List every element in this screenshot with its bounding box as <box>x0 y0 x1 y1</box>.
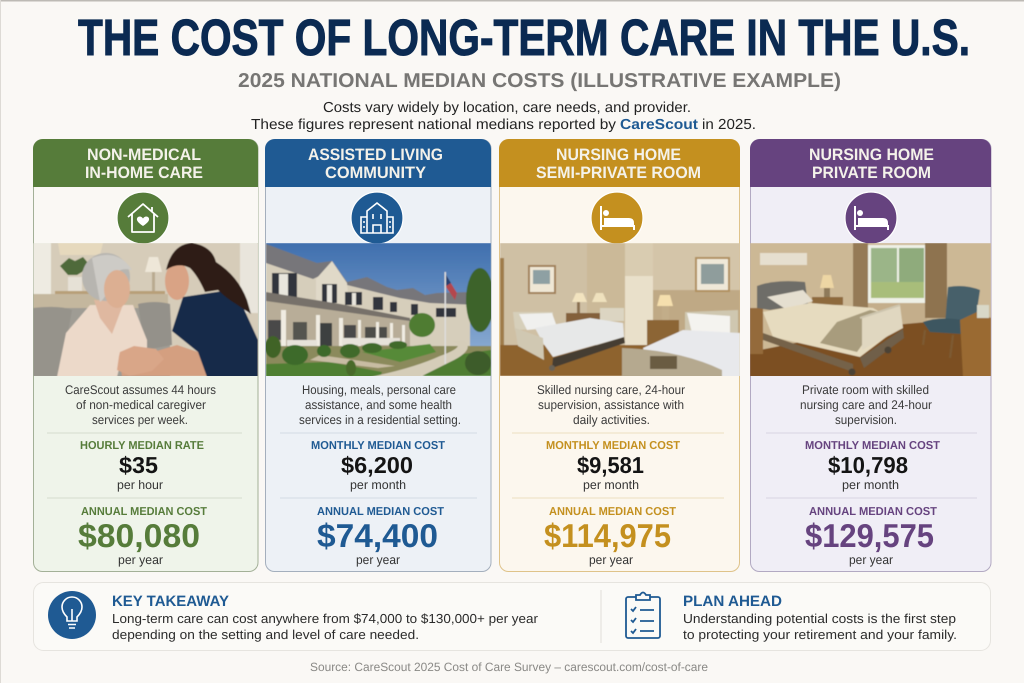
panel: assisted living community <box>265 139 494 572</box>
subtitle: 2025 NATIONAL MEDIAN COSTS (ILLUSTRATIVE EXAMPLE) <box>238 70 841 92</box>
annual cost: ANNUAL MEDIAN COST <box>317 506 444 518</box>
photo: semi-private room with two beds <box>500 243 740 377</box>
annual cost: per year <box>118 553 163 567</box>
annual cost: $129,575 <box>805 517 934 554</box>
description: supervision. <box>835 413 897 427</box>
description: of non-medical caregiver <box>76 398 206 412</box>
icon: bed <box>591 192 643 244</box>
header: assisted living community <box>265 139 491 187</box>
panel: nursing home semi-private room <box>499 139 740 572</box>
hourly rate: per hour <box>117 478 163 492</box>
monthly cost: $6,200 <box>341 452 413 478</box>
header: nursing home private room <box>750 139 991 187</box>
monthly cost <box>546 440 680 492</box>
monthly cost: per month <box>842 478 899 492</box>
annual cost: $74,400 <box>317 517 438 554</box>
annual cost <box>78 506 207 567</box>
monthly cost <box>805 440 940 492</box>
annual cost <box>544 506 676 567</box>
monthly cost: MONTHLY MEDIAN COST <box>546 440 680 452</box>
description <box>537 383 685 427</box>
monthly cost: MONTHLY MEDIAN COST <box>311 440 445 452</box>
monthly cost: per month <box>350 478 406 492</box>
annual cost: $80,080 <box>78 517 200 554</box>
hourly rate: $35 <box>119 452 158 478</box>
header: assisted living community: ASSISTED LIVING <box>308 146 443 164</box>
panel: nursing home private room <box>750 139 991 572</box>
annual cost: ANNUAL MEDIAN COST <box>549 506 676 518</box>
photo: caregiver and senior woman <box>33 243 259 377</box>
monthly cost: $10,798 <box>828 452 908 478</box>
header: nursing home semi-private room <box>499 139 740 187</box>
intro text: CareScout <box>620 117 698 133</box>
description <box>800 383 932 427</box>
intro text: in 2025. <box>702 117 756 133</box>
panel: non-medical in-home care <box>33 139 259 572</box>
description: CareScout assumes 44 hours <box>65 383 216 397</box>
header: non-medical in-home care: IN-HOME CARE <box>85 164 203 182</box>
description: services per week. <box>92 413 188 427</box>
header: non-medical in-home care: NON-MEDICAL <box>87 146 201 164</box>
description: services in a residential setting. <box>299 413 461 427</box>
callout: key takeaway <box>112 593 539 642</box>
header: assisted living community: COMMUNITY <box>325 164 426 182</box>
monthly cost <box>311 440 445 492</box>
callout: plan ahead: PLAN AHEAD <box>683 593 782 610</box>
icon: building <box>351 192 403 244</box>
description: daily activities. <box>573 413 650 427</box>
annual cost: ANNUAL MEDIAN COST <box>809 506 937 518</box>
icon: light bulb <box>48 591 96 639</box>
description: nursing care and 24-hour <box>800 398 932 412</box>
panel: bottom callouts <box>34 582 990 650</box>
intro text <box>251 100 756 133</box>
annual cost <box>805 506 937 567</box>
description <box>65 383 216 427</box>
description: Private room with skilled <box>802 383 929 397</box>
header: non-medical in-home care <box>33 139 258 187</box>
callout: plan ahead: to protecting your retirement and your family. <box>683 627 957 642</box>
hourly rate: HOURLY MEDIAN RATE <box>80 440 204 452</box>
header: nursing home private room: PRIVATE ROOM <box>812 164 931 182</box>
icon: clipboard checklist <box>626 592 660 638</box>
lawns and path <box>266 346 491 376</box>
monthly cost: $9,581 <box>577 452 644 478</box>
annual cost: per year <box>849 553 893 567</box>
intro text: Costs vary widely by location, care needs, and provider. <box>323 100 691 116</box>
callout: plan ahead <box>683 593 957 642</box>
description: Skilled nursing care, 24-hour <box>537 383 685 397</box>
description: supervision, assistance with <box>538 398 684 412</box>
monthly cost: MONTHLY MEDIAN COST <box>805 440 940 452</box>
annual cost: per year <box>356 553 400 567</box>
source line: Source: CareScout 2025 Cost of Care Survey – carescout.com/cost-of-care <box>310 660 708 674</box>
callout: key takeaway: KEY TAKEAWAY <box>112 593 229 610</box>
annual cost <box>317 506 444 567</box>
description: Housing, meals, personal care <box>302 383 456 397</box>
description: assistance, and some health <box>305 398 452 412</box>
annual cost: $114,975 <box>544 517 671 554</box>
hourly rate <box>80 440 204 492</box>
icon: house with heart <box>117 192 169 244</box>
header: nursing home semi-private room: SEMI-PRIVATE ROOM <box>536 164 701 182</box>
description <box>299 383 461 427</box>
photo: residential community building <box>265 243 494 377</box>
callout: plan ahead: Understanding potential costs is the first step <box>683 611 956 626</box>
porch roof and lower storey <box>266 292 410 322</box>
monthly cost: per month <box>583 478 639 492</box>
callout: key takeaway: depending on the setting and level of care needed. <box>112 627 419 642</box>
photo: private room with window <box>750 243 991 377</box>
header: nursing home private room: NURSING HOME <box>809 146 934 164</box>
header: nursing home semi-private room: NURSING HOME <box>556 146 681 164</box>
annual cost: per year <box>589 553 633 567</box>
intro text: These figures represent national medians reported by <box>251 117 617 133</box>
icon: bed <box>845 192 897 244</box>
callout: key takeaway: Long-term care can cost anywhere from $74,000 to $130,000+ per year <box>112 611 539 626</box>
annual cost: ANNUAL MEDIAN COST <box>81 506 207 518</box>
upper storey facade <box>266 262 470 350</box>
